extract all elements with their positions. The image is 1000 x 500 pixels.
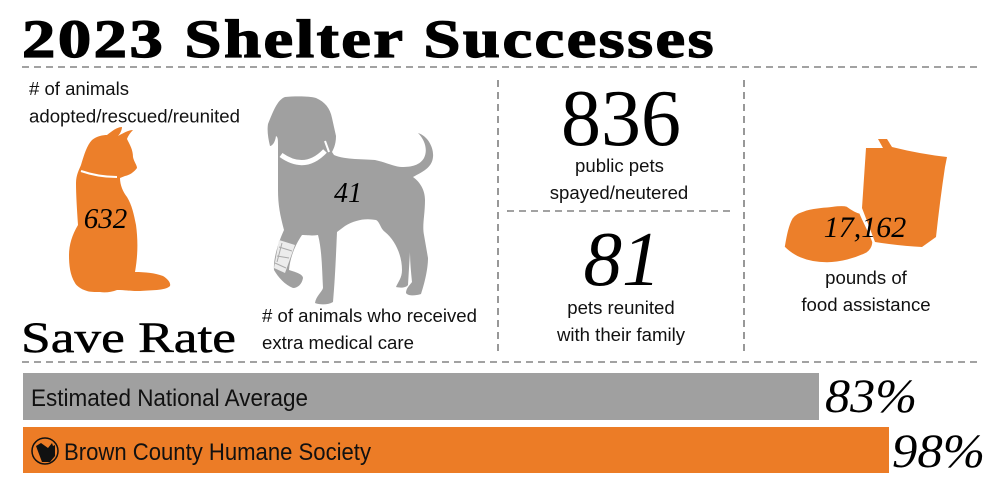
heading: save rate: Save Rate <box>21 315 236 362</box>
text: medical label: extra medical care <box>262 332 414 353</box>
icon: grey dog with bandaged leg <box>268 96 433 304</box>
text: food label: pounds of <box>825 267 908 288</box>
text: spayed label <box>550 155 688 203</box>
panel: reunited <box>556 216 686 345</box>
bar: national average: Estimated National Average <box>31 385 308 412</box>
panel: food assistance <box>784 139 947 315</box>
text: reunited label <box>556 297 686 345</box>
icon: food bag and bowl <box>784 139 947 263</box>
bar: Brown County Humane Society <box>23 427 889 473</box>
bar: Brown County Humane Society: Brown County Humane Society <box>64 439 371 466</box>
text: medical label <box>262 305 477 353</box>
text: reunited label: with their family <box>556 324 686 345</box>
text: adopted label <box>29 79 240 126</box>
number: 81: 81 <box>584 216 660 302</box>
panel: extra medical care <box>262 96 477 353</box>
text: adopted label: adopted/rescued/reunited <box>29 106 240 126</box>
number: 17,162: 17,162 <box>824 211 906 244</box>
text: spayed label: spayed/neutered <box>550 182 688 203</box>
number: 632: 632 <box>84 203 127 235</box>
icon: orange cat <box>69 127 170 292</box>
panel: spayed neutered <box>550 75 688 203</box>
value: 83%: 83% <box>825 370 917 423</box>
icon: shelter logo <box>32 438 58 464</box>
title: 2023 Shelter Successes <box>22 9 716 69</box>
panel: animals adopted <box>29 79 240 292</box>
text: medical label: # of animals who received <box>262 305 477 326</box>
text: reunited label: pets reunited <box>567 297 675 318</box>
text: spayed label: public pets <box>575 155 664 176</box>
number: 836: 836 <box>561 75 681 163</box>
bar: national average <box>23 373 819 420</box>
value: 98%: 98% <box>892 425 985 478</box>
text: food label: food assistance <box>801 294 931 315</box>
text: adopted label: # of animals <box>29 79 129 99</box>
text: food label <box>801 267 931 315</box>
number: 41: 41 <box>334 178 362 209</box>
